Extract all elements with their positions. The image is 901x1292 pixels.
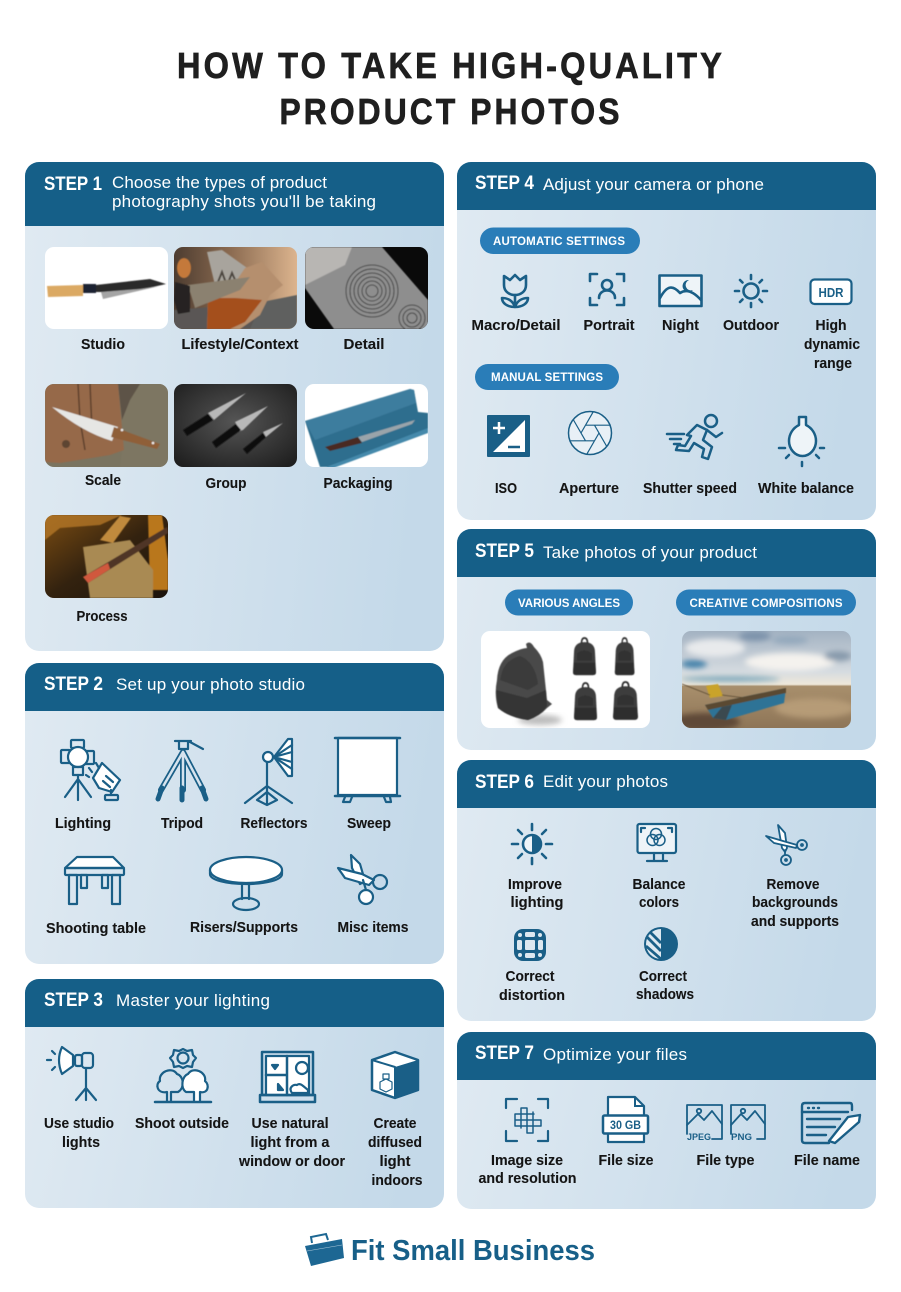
icon: sweep: [335, 738, 400, 802]
step 7 header: Optimize your files: [543, 1045, 687, 1064]
label: correct distortion: [499, 968, 565, 1004]
label: correct shadows: shadows: [636, 986, 694, 1003]
label: file size: File size: [598, 1152, 654, 1169]
photo: backpacks: [481, 631, 650, 728]
icon: studio lights: [47, 1047, 96, 1100]
label: studio: Studio: [81, 336, 125, 353]
icon: file size: 30 GB: [610, 1120, 641, 1132]
icon: white balance: [779, 417, 824, 466]
label: image size: Image size: [491, 1152, 563, 1169]
label: create diffused light: light: [380, 1153, 411, 1170]
icon: briefcase: [305, 1234, 344, 1266]
label: create diffused light: indoors: [372, 1172, 422, 1189]
label: high dynamic range: range: [814, 355, 852, 372]
step 4 header: STEP 4: [475, 173, 534, 194]
label: image size: and resolution: [478, 1170, 576, 1187]
icon: shutter speed: [667, 415, 722, 459]
photo: detail: [305, 247, 428, 331]
step 1 header: STEP 1: [44, 174, 102, 195]
label: white balance: White balance: [758, 480, 854, 497]
icon: file type: [687, 1105, 765, 1143]
label: improve lighting: [508, 876, 564, 911]
label: shooting table: Shooting table: [46, 920, 146, 937]
pill: manual settings: MANUAL SETTINGS: [491, 372, 603, 384]
pill: automatic settings: AUTOMATIC SETTINGS: [493, 236, 625, 248]
icon: macro tulip: [502, 275, 528, 307]
title: HOW TO TAKE HIGH-QUALITY: [177, 45, 725, 86]
panel: step 6: [457, 760, 876, 1021]
label: shoot outside: Shoot outside: [135, 1115, 229, 1132]
label: create diffused light: diffused: [368, 1134, 422, 1151]
icon: diffused light box: [372, 1052, 418, 1098]
panel: step 2: [25, 663, 444, 964]
label: process: Process: [76, 608, 128, 625]
label: use natural light: window or door: [238, 1153, 345, 1170]
title: PRODUCT PHOTOS: [280, 91, 622, 132]
step 5 header: Take photos of your product: [543, 543, 757, 562]
icon: file type: JPEG: [687, 1132, 711, 1143]
label: improve lighting: lighting: [510, 894, 564, 911]
panel: step 4: [457, 162, 876, 520]
pill: manual settings: [475, 364, 619, 390]
label: balance colors: colors: [639, 894, 679, 911]
label: group: Group: [206, 475, 246, 492]
icon: tripod: [158, 741, 206, 800]
label: shutter speed: Shutter speed: [643, 480, 737, 497]
label: remove backgrounds: [751, 876, 839, 930]
step 2 header: [25, 663, 444, 711]
step 1 header: Choose the types of product: [112, 173, 327, 192]
step 2 header: STEP 2: [44, 674, 103, 695]
label: remove backgrounds: Remove: [766, 876, 820, 893]
icon: correct distortion: [514, 929, 546, 961]
label: reflectors: Reflectors: [240, 815, 308, 832]
label: create diffused light: [368, 1115, 422, 1189]
photo: lifestyle: [174, 247, 297, 329]
label: night: Night: [662, 317, 699, 334]
label: sweep: Sweep: [347, 815, 391, 832]
label: correct shadows: Correct: [639, 968, 687, 985]
icon: hdr: [810, 280, 852, 304]
pill: various angles: [505, 590, 633, 616]
photo: boat on beach: [682, 631, 851, 728]
logo: Fit Small Business: Fit Small Business: [351, 1235, 595, 1267]
icon: file type: PNG: [731, 1132, 752, 1143]
icon: misc items scissors: [338, 855, 387, 904]
title: [177, 45, 725, 132]
step 4 header: [457, 162, 876, 210]
step 6 header: Edit your photos: [543, 772, 668, 791]
label: use natural light: light from a: [250, 1134, 330, 1151]
label: outdoor: Outdoor: [723, 317, 779, 334]
label: high dynamic range: High: [816, 317, 846, 334]
label: remove backgrounds: and supports: [751, 913, 839, 930]
label: improve lighting: Improve: [508, 876, 562, 893]
icon: file name: [802, 1103, 860, 1143]
icon: risers/supports: [210, 857, 282, 910]
label: use studio lights: [44, 1115, 114, 1151]
label: iso: ISO: [495, 480, 517, 497]
label: create diffused light: Create: [374, 1115, 416, 1132]
label: use natural light: Use natural: [252, 1115, 328, 1132]
step 6 header: [457, 760, 876, 808]
label: correct shadows: [636, 968, 694, 1003]
label: use studio lights: lights: [62, 1134, 100, 1151]
icon: portrait: [590, 274, 624, 305]
panel: step 7: [457, 1032, 876, 1209]
label: use studio lights: Use studio: [44, 1115, 114, 1132]
icon: file size: [603, 1097, 648, 1142]
icon: natural light window: [260, 1052, 315, 1102]
step 3 header: [25, 979, 444, 1027]
panel: step 5: [457, 529, 876, 750]
photo: packaging: [305, 384, 428, 470]
pill: various angles: VARIOUS ANGLES: [518, 598, 620, 610]
label: aperture: Aperture: [559, 480, 619, 497]
step 6 header: STEP 6: [475, 772, 534, 793]
label: misc items: Misc items: [338, 919, 408, 936]
photo: scale: [45, 384, 168, 467]
icon: balance colors: [638, 824, 676, 861]
step 3 header: STEP 3: [44, 990, 103, 1011]
icon: reflectors: [245, 739, 292, 805]
label: correct distortion: Correct: [506, 968, 554, 985]
label: lifestyle/context: Lifestyle/Context: [182, 336, 299, 353]
panel: step 1: [25, 162, 444, 651]
label: image size: [478, 1152, 576, 1187]
pill: creative compositions: [676, 590, 856, 616]
label: balance colors: Balance: [632, 876, 686, 893]
step 7 header: STEP 7: [475, 1043, 534, 1064]
icon: correct shadows: [644, 927, 678, 961]
step 3 header: Master your lighting: [116, 991, 270, 1010]
label: packaging: Packaging: [324, 475, 392, 492]
label: high dynamic range: dynamic: [804, 336, 860, 353]
photo: process: [45, 515, 168, 598]
label: balance colors: [632, 876, 686, 911]
label: tripod: Tripod: [161, 815, 203, 832]
photo: studio: [44, 246, 169, 330]
step 5 header: [457, 529, 876, 577]
step 4 header: Adjust your camera or phone: [543, 175, 764, 194]
label: correct distortion: distortion: [499, 987, 565, 1004]
step 7 header: [457, 1032, 876, 1080]
icon: remove backgrounds scissors: [766, 825, 807, 865]
icon: shoot outside: [155, 1049, 211, 1102]
icon: outdoor: [735, 275, 767, 307]
pill: automatic settings: [480, 228, 640, 254]
icon: aperture: [568, 412, 612, 454]
label: remove backgrounds: backgrounds: [752, 894, 838, 911]
label: use natural light: [238, 1115, 345, 1170]
icon: shooting table: [65, 857, 124, 904]
label: portrait: Portrait: [584, 317, 635, 334]
label: macro/detail: Macro/Detail: [472, 317, 560, 334]
label: scale: Scale: [85, 472, 121, 489]
icon: hdr: HDR: [818, 285, 844, 300]
label: high dynamic range: [804, 317, 860, 372]
step 1 header: photography shots you'll be taking: [112, 192, 376, 211]
label: detail: Detail: [344, 336, 384, 353]
photo: group: [174, 384, 297, 467]
icon: lighting: [61, 740, 120, 800]
icon: improve lighting: [512, 824, 552, 864]
icon: night: [660, 276, 702, 306]
label: file name: File name: [794, 1152, 860, 1169]
label: file type: File type: [696, 1152, 754, 1169]
panel: step 3: [25, 979, 444, 1208]
label: lighting: Lighting: [55, 815, 111, 832]
step 1 header: [25, 162, 444, 226]
icon: iso: [487, 415, 530, 457]
step 5 header: STEP 5: [475, 541, 534, 562]
step 2 header: Set up your photo studio: [116, 675, 305, 694]
icon: image size: [506, 1099, 548, 1141]
label: risers/supports: Risers/Supports: [190, 919, 298, 936]
pill: creative compositions: CREATIVE COMPOSITIONS: [690, 598, 843, 610]
